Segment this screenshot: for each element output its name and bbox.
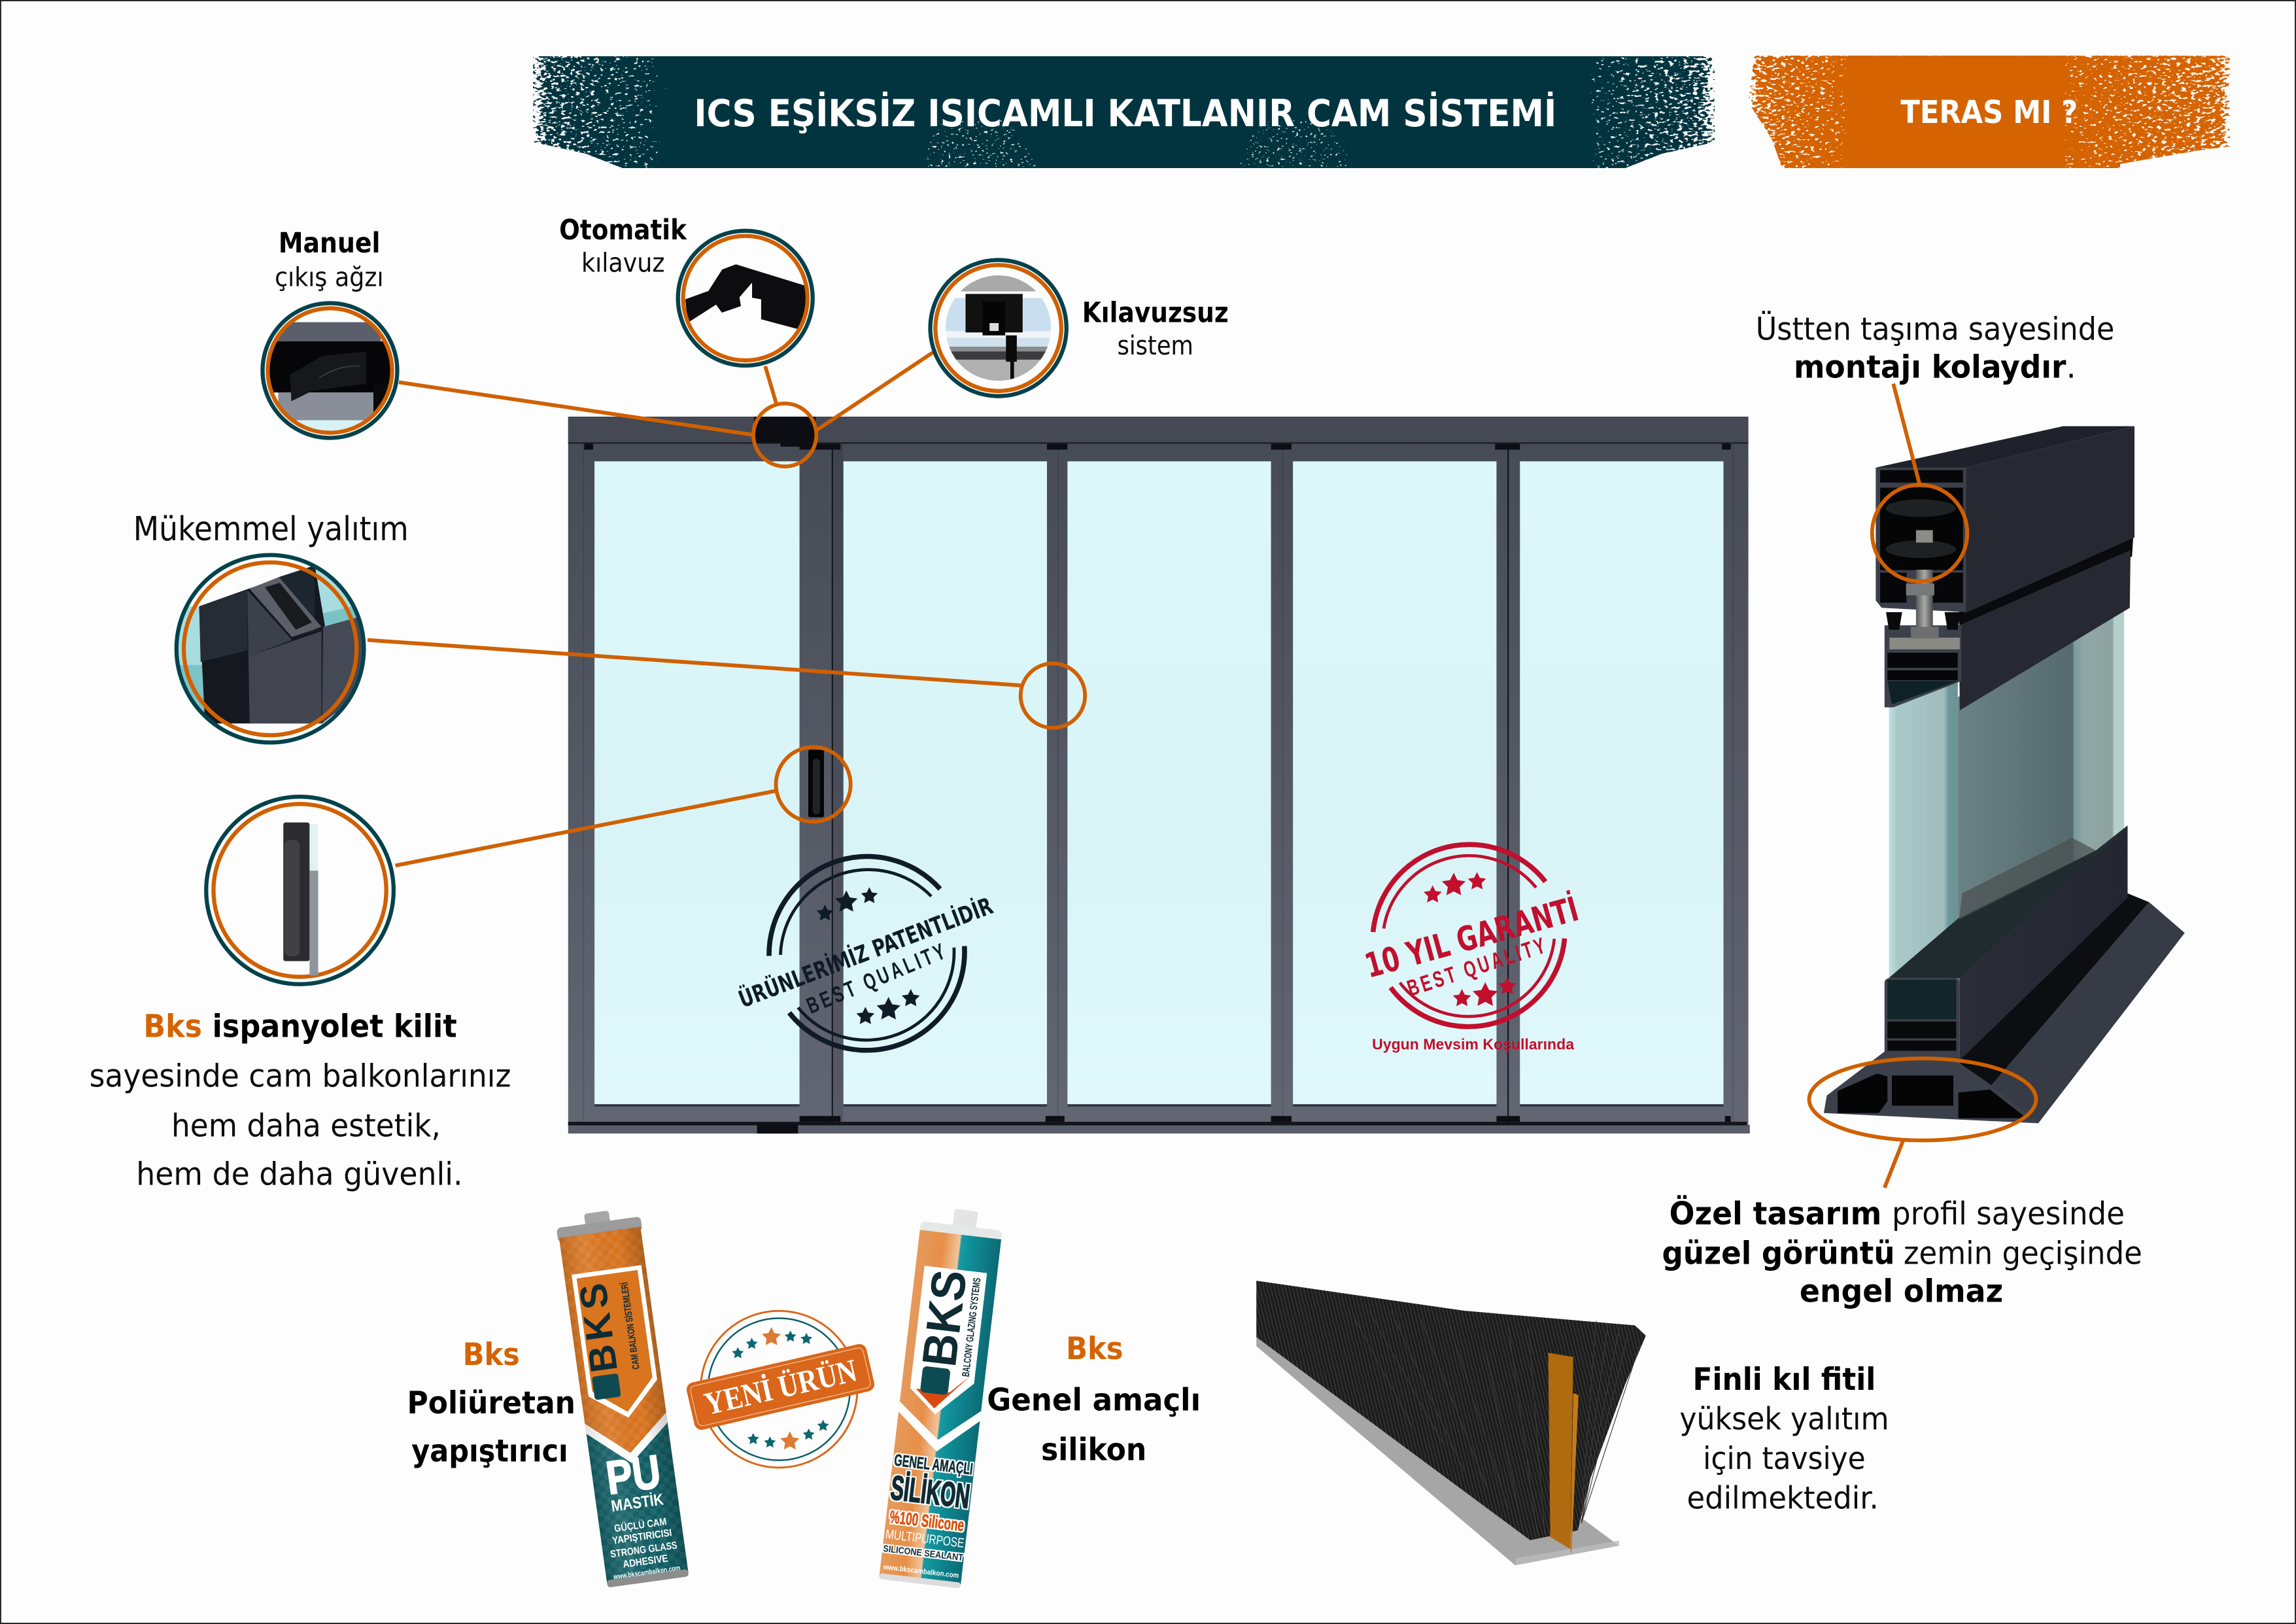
text: special design profile: zemin geçişinde [1904,1235,2142,1271]
text: top carriage: montajı kolaydır [1794,349,2066,386]
text: special design profile: profil sayesinde [1892,1196,2125,1232]
label: otomatik: kılavuz [581,247,665,278]
text: bks espagnolette lock: sayesinde cam balkonlarınız [90,1058,511,1094]
text: bks espagnolette lock: hem de daha güvenli. [136,1156,463,1192]
tube: pu mastik: STRONG GLASS [609,1540,678,1560]
text: finned brush seal: yüksek yalıtım [1679,1401,1889,1437]
text: silicone: silikon [1041,1432,1146,1468]
text: silicone [987,1331,1201,1468]
warranty stamp: 10 YIL GARANTİ [1360,889,1583,986]
text: pu adhesive: Bks [463,1337,520,1373]
badge: teras mi: TERAS MI ? [1900,94,2078,131]
top rail groove [1959,533,2133,632]
folding glass door system [568,417,1750,1133]
patent stamp [735,856,997,1050]
threshold ramp [1991,902,2185,1123]
title banner [533,56,1715,168]
text: special design profile: güzel görüntü [1662,1235,1894,1271]
text: bks espagnolette lock: hem daha estetik, [171,1108,441,1145]
profile cross-section illustration [1809,384,2185,1188]
tube: pu mastik: BKS [572,1281,626,1375]
tube: silikon: SILICONE SEALANT [883,1544,964,1563]
tube: silikon: SİLİKON [889,1468,972,1515]
text: top carriage: Üstten taşıma sayesinde [1756,311,2114,347]
label: kilavuzsuz: Kılavuzsuz [1082,298,1229,330]
stamp: yeni urun: YENİ ÜRÜN [701,1352,860,1422]
label: otomatik [559,215,687,278]
tube: pu mastik [555,1206,691,1588]
text: finned brush seal: Finli kıl fitil [1692,1362,1876,1398]
front glass [1889,674,1958,984]
text: finned brush seal: için tavsiye [1703,1441,1866,1477]
back glass [1958,600,2124,987]
tube: pu mastik: CAM BALKON SİSTEMLERİ [619,1281,642,1370]
threshold front [1824,1052,2038,1123]
tube: pu mastik: ADHESIVE [622,1553,669,1570]
text: silicone: Genel amaçlı [987,1382,1201,1418]
text: top carriage: . [2066,349,2076,386]
lock handle on mullion [808,750,824,817]
tube: silikon [879,1205,1004,1589]
badge: teras mi [1749,56,2230,168]
callout lines [368,353,1085,865]
text: top carriage [1756,311,2114,386]
rollers [1885,500,1956,517]
warranty stamp: BEST QUALITY [1404,933,1549,1001]
tube: pu mastik: www.bkscambalkon.com [613,1564,681,1581]
callout: bks lock [206,797,394,984]
label: mukemmel yalitim: Mükemmel yalıtım [133,510,409,548]
tube: pu mastik: MASTİK [610,1491,665,1515]
text: silicone: Bks [1066,1331,1123,1367]
label: otomatik: Otomatik [559,215,687,247]
top rail side [1966,426,2134,613]
text: pu adhesive: yapıştırıcı [411,1434,568,1470]
tube: pu mastik: GÜÇLÜ CAM [613,1515,667,1534]
text: special design profile: engel olmaz [1800,1273,2003,1310]
tube: silikon: BKS [912,1267,977,1370]
tube: pu mastik: PU [603,1445,664,1505]
tube: silikon: GENEL AMAÇLI [893,1452,974,1479]
callout: kilavuzsuz sistem [931,260,1067,396]
callout: manuel cikis agzi [262,303,397,438]
bottom rail front [1885,978,1960,1066]
glass panes [594,461,1723,1104]
patent stamp: ÜRÜNLERİMİZ PATENTLİDİR [735,892,997,1014]
top rail front [1876,468,1966,612]
highlight ellipses [1872,485,1967,581]
logo badge [908,1266,987,1419]
top rail top face [1876,426,2134,468]
text: special design profile [1662,1195,2142,1310]
text: bks espagnolette lock: ispanyolet kilit [213,1008,457,1045]
text: pu adhesive [407,1337,575,1470]
tube: silikon: MULTIPURPOSE [885,1527,965,1551]
callout: profile section insulation [176,555,366,742]
label: kilavuzsuz: sistem [1117,330,1193,361]
text: special design profile: Özel tasarım [1670,1195,1881,1232]
bolt [1916,570,1933,629]
text: finned brush seal [1679,1362,1889,1516]
logo badge [572,1265,662,1423]
tube: silikon: %100 Silicone [889,1507,965,1535]
bottom rail side [1960,825,2127,1060]
label: manuel: çıkış ağzı [275,262,384,292]
tube: silikon: www.bkscambalkon.com [882,1563,959,1580]
patent stamp: BEST QUALITY [803,939,949,1019]
brush seal illustration [1256,1281,1646,1565]
lower carrier front [1885,625,1961,708]
warranty stamp: Uygun Mevsim Koşullarında [1372,1035,1575,1052]
callout: otomatik kilavuz [678,231,813,366]
tube: silikon: BALCONY GLAZING SYSTEMS [961,1277,983,1377]
warranty stamp [1360,844,1583,1052]
title banner: ICS EŞİKSİZ ISICAMLI KATLANIR CAM SİSTEMİ [694,92,1556,135]
tube: pu mastik: YAPIŞTIRICISI [611,1527,672,1547]
stamp: yeni urun [685,1311,876,1468]
bottom rail inner [1889,825,2127,978]
text: bks espagnolette lock: Bks [143,1008,202,1045]
text: bks espagnolette lock [90,1008,511,1192]
label: manuel [275,228,384,292]
text: finned brush seal: edilmektedir. [1687,1480,1879,1516]
text: pu adhesive: Poliüretan [407,1385,575,1421]
label: kilavuzsuz [1082,298,1229,361]
label: manuel: Manuel [279,228,381,260]
